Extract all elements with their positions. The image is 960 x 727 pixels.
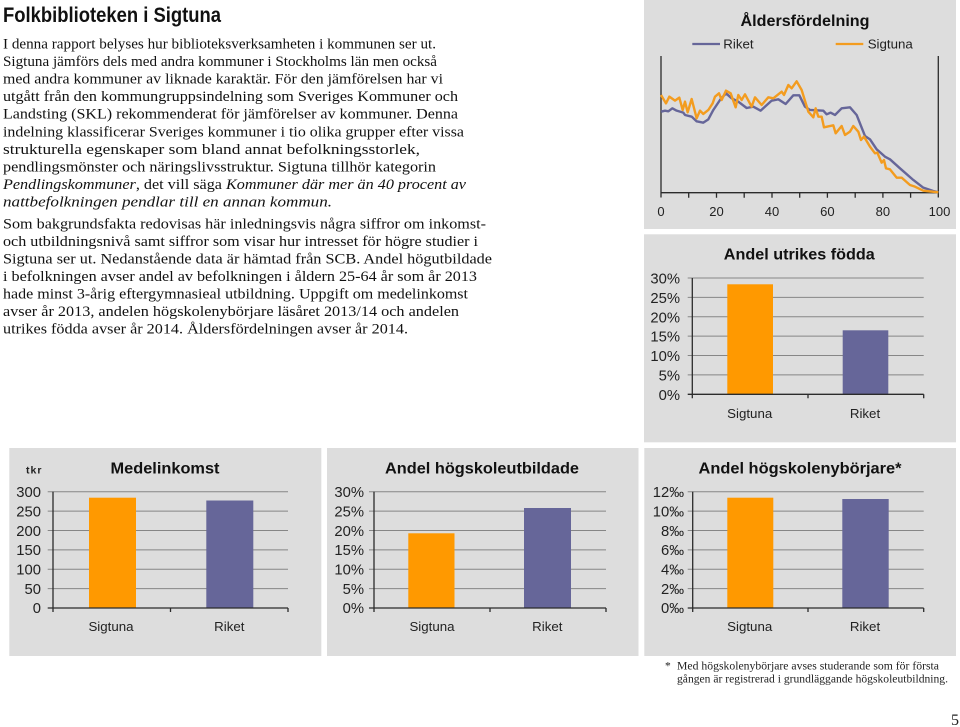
category labels: Riket bbox=[850, 406, 880, 421]
category labels: Sigtuna bbox=[409, 619, 455, 634]
y-axis labels: 20% bbox=[334, 524, 364, 540]
category labels: Riket bbox=[214, 619, 245, 634]
y-axis labels: 30% bbox=[650, 272, 680, 288]
unit label: tkr: tkr bbox=[26, 464, 42, 476]
text block: introduction paragraph: pendlingsmönster och näringslivsstruktur. Sigtuna tillhör kategorin bbox=[3, 159, 437, 175]
y-axis labels bbox=[334, 485, 364, 617]
y-axis labels: 0‰ bbox=[661, 601, 684, 617]
y-axis labels: 15% bbox=[650, 330, 680, 346]
text block: background facts paragraph: och utbildningsnivå samt siffror som visar hur intresset för högre studier i bbox=[3, 234, 478, 250]
y-axis labels: 25% bbox=[650, 291, 680, 307]
line: Riket bbox=[661, 93, 938, 192]
y-axis labels: 4‰ bbox=[661, 563, 684, 579]
text block: background facts paragraph: utrikes födda avser år 2014. Åldersfördelningen avser år 2014. bbox=[3, 321, 408, 337]
y-axis labels: 12‰ bbox=[653, 485, 684, 501]
y-axis labels: 10% bbox=[334, 563, 364, 579]
y-axis labels bbox=[653, 485, 684, 617]
text block: introduction paragraph: utgått från den kommungruppsindelning som Sveriges Kommuner och bbox=[3, 89, 459, 105]
text block: introduction paragraph: med andra kommuner av liknade karaktär. För den jämförelsen har vi bbox=[3, 71, 443, 87]
category labels: Riket bbox=[850, 619, 880, 634]
bar: Sigtuna bbox=[727, 498, 773, 608]
y-axis labels: 5% bbox=[659, 368, 680, 384]
y-axis labels: 8‰ bbox=[661, 524, 684, 540]
y-axis labels: 0% bbox=[659, 388, 680, 404]
category labels bbox=[727, 406, 880, 421]
y-axis labels: 200 bbox=[16, 524, 41, 540]
footnote bbox=[665, 660, 948, 686]
x-axis labels: 40 bbox=[765, 204, 779, 219]
footnote: Med högskolenybörjare avses studerande som för första bbox=[677, 660, 939, 672]
y-axis labels bbox=[650, 272, 680, 404]
gridlines and ticks bbox=[369, 492, 606, 589]
text block: introduction paragraph: Sigtuna jämförs dels med andra kommuner i Stockholms län men också bbox=[3, 54, 437, 70]
y-axis labels: 6‰ bbox=[661, 543, 684, 559]
text block: background facts paragraph: hade minst 3-årig eftergymnasieal utbildning. Uppgift om medelinkomst bbox=[3, 286, 469, 302]
text block: introduction paragraph bbox=[2, 36, 466, 210]
axes bbox=[688, 492, 924, 612]
y-axis labels: 250 bbox=[16, 504, 41, 520]
x-axis labels: 80 bbox=[876, 204, 890, 219]
x-axis labels: 0 bbox=[657, 204, 665, 219]
text block: background facts paragraph: avser år 2013, andelen högskolenybörjare läsåret 2013/14 och andelen bbox=[3, 304, 460, 320]
y-axis labels: 30% bbox=[334, 485, 364, 501]
text block: background facts paragraph: Som bakgrundsfakta redovisas här inledningsvis några siffror om inkomst- bbox=[3, 216, 486, 232]
y-axis labels bbox=[16, 485, 41, 617]
text block: background facts paragraph bbox=[3, 216, 492, 337]
y-axis labels: 150 bbox=[16, 543, 41, 559]
gridlines and ticks bbox=[688, 492, 924, 589]
bar: Sigtuna bbox=[408, 533, 454, 608]
bar: Sigtuna bbox=[727, 284, 773, 394]
bar: Riket bbox=[206, 500, 253, 608]
gridlines and ticks bbox=[688, 278, 924, 375]
heading: Andel högskolenybörjare: Andel högskolenybörjare* bbox=[698, 460, 902, 477]
y-axis labels: 15% bbox=[334, 543, 364, 559]
panel: Åldersfördelning line chart bbox=[644, 0, 956, 229]
heading: Andel utrikes födda: Andel utrikes födda bbox=[724, 246, 875, 263]
y-axis labels: 0 bbox=[33, 601, 41, 617]
category labels: Riket bbox=[532, 619, 563, 634]
category labels bbox=[409, 619, 563, 634]
text block: background facts paragraph: i befolkningen avser andel av befolkningen i åldern 25-64 år som år 2013 bbox=[3, 269, 477, 285]
legend bbox=[692, 36, 913, 52]
text block: introduction paragraph: indelning klassificerar Sveriges kommuner i tio olika grupper efter vissa bbox=[3, 124, 464, 140]
footnote: * bbox=[665, 660, 671, 672]
y-axis labels: 100 bbox=[16, 563, 41, 579]
heading: Åldersfördelning: Åldersfördelning bbox=[740, 11, 870, 30]
text block: introduction paragraph: strukturella egenskaper som bland annat befolkningsstorlek, bbox=[3, 142, 420, 158]
text block: introduction paragraph: I denna rapport belyses hur biblioteksverksamheten i kommunen ser ut. bbox=[3, 36, 436, 52]
bar: Riket bbox=[524, 508, 571, 608]
legend: Riket bbox=[723, 36, 754, 52]
y-axis labels: 0% bbox=[343, 601, 364, 617]
y-axis labels: 25% bbox=[334, 504, 364, 520]
panel: Andel utrikes födda bar chart bbox=[644, 234, 956, 442]
line: Sigtuna bbox=[661, 81, 938, 192]
text block: introduction paragraph: Pendlingskommuner , det vill säga Kommuner där mer än 40 procent av bbox=[2, 177, 466, 193]
x-axis labels bbox=[657, 204, 950, 219]
y-axis labels: 5% bbox=[343, 582, 364, 598]
y-axis labels: 50 bbox=[25, 582, 41, 598]
panel: Andel högskoleutbildade bar chart bbox=[327, 448, 638, 656]
category labels: Sigtuna bbox=[88, 619, 134, 634]
x-axis labels: 20 bbox=[709, 204, 724, 219]
y-axis labels: 10% bbox=[650, 349, 680, 365]
text block: introduction paragraph: Landsting (SKL) rekommenderat för jämförelser av kommuner. Denna bbox=[3, 106, 458, 122]
y-axis labels: 2‰ bbox=[661, 582, 684, 598]
category labels bbox=[727, 619, 880, 634]
x-axis labels: 60 bbox=[820, 204, 835, 219]
heading: Andel högskoleutbildade: Andel högskoleutbildade bbox=[385, 460, 579, 477]
bar: Sigtuna bbox=[89, 498, 136, 608]
heading: Medelinkomst: Medelinkomst bbox=[110, 460, 220, 477]
gridlines and ticks bbox=[48, 492, 288, 589]
y-axis labels: 10‰ bbox=[653, 504, 684, 520]
category labels bbox=[88, 619, 245, 634]
panel: Medelinkomst bar chart bbox=[9, 448, 321, 656]
category labels: Sigtuna bbox=[727, 406, 773, 421]
text block: introduction paragraph: nattbefolkningen pendlar till en annan kommun. bbox=[3, 194, 332, 210]
text block: background facts paragraph: Sigtuna ser ut. Nedanstående data är hämtad från SCB. Andel högutbildade bbox=[3, 251, 492, 267]
y-axis labels: 300 bbox=[16, 485, 41, 501]
axes bbox=[369, 492, 606, 612]
bar: Riket bbox=[842, 499, 889, 608]
x-axis labels: 100 bbox=[929, 204, 950, 219]
y-axis labels: 20% bbox=[650, 310, 680, 326]
category labels: Sigtuna bbox=[727, 619, 773, 634]
axes bbox=[48, 492, 288, 612]
chart axes bbox=[661, 56, 938, 198]
bar: Riket bbox=[843, 330, 888, 394]
panel: Andel högskolenybörjare bar chart bbox=[644, 448, 956, 656]
axes bbox=[688, 278, 924, 398]
title: Folkbiblioteken i Sigtuna bbox=[3, 4, 221, 27]
footnote: gången är registrerad i grundläggande högskoleutbildning. bbox=[677, 673, 948, 686]
legend: Sigtuna bbox=[868, 36, 913, 52]
